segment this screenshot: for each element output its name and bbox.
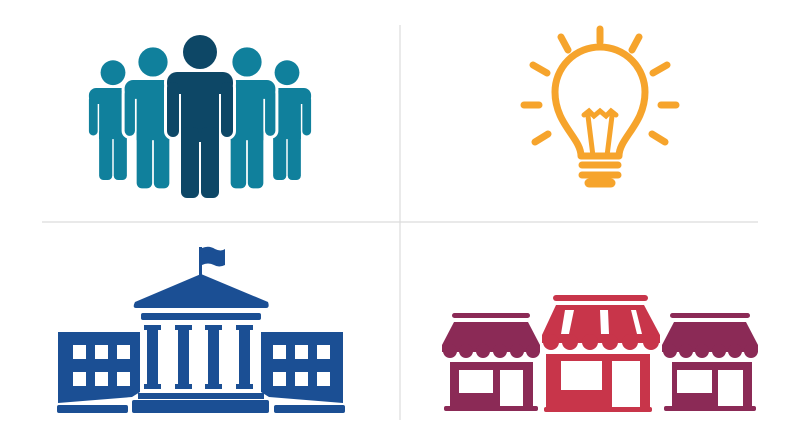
base	[582, 165, 618, 175]
person: outer left	[89, 60, 137, 180]
right wing	[261, 332, 343, 403]
left wing	[58, 332, 140, 403]
flag	[199, 247, 202, 277]
store: middle	[542, 295, 660, 412]
person: second left	[125, 47, 181, 188]
person: outer right	[263, 60, 311, 180]
awning stripes	[561, 310, 642, 334]
columns	[144, 325, 161, 330]
store: right	[662, 313, 758, 411]
person: second right	[219, 47, 275, 188]
icon: light bulb	[524, 29, 676, 183]
bulb outline	[555, 47, 645, 156]
rays	[524, 29, 676, 142]
store: left	[442, 313, 540, 411]
person: center leader	[167, 35, 233, 198]
icon: group of people	[89, 35, 311, 198]
filament	[584, 111, 616, 156]
icon: government building	[57, 247, 345, 413]
icon: storefronts	[442, 295, 758, 412]
roof	[134, 274, 269, 308]
steps	[138, 393, 264, 399]
